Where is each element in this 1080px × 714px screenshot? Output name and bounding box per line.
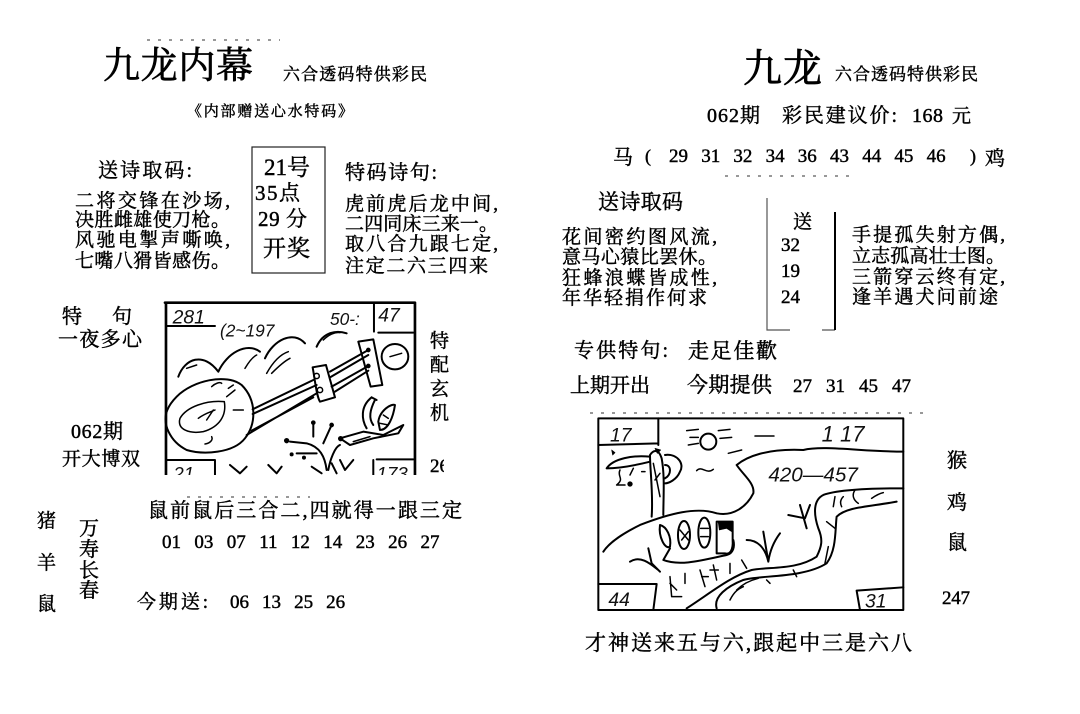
this issue label: 今期送: xyxy=(137,591,208,613)
small disc xyxy=(382,344,408,369)
bottom rhyme: 才神送来五与六,跟起中三是六八 xyxy=(585,631,912,655)
bracketed subtitle: 《内部赠送心水特码》 xyxy=(187,103,353,120)
left sketch: (2~197 xyxy=(220,321,276,341)
bracket with numbers: 送 xyxy=(793,211,812,233)
issue label xyxy=(62,420,140,470)
right sketch: 1 17 xyxy=(822,422,865,447)
grass xyxy=(630,505,810,572)
this issue numbers: 06 13 25 26 xyxy=(230,592,345,613)
wheel xyxy=(166,379,253,453)
left sketch: 21 xyxy=(172,463,194,484)
left sketch: 173 xyxy=(377,463,408,484)
last issue and this issue: 上期开出 xyxy=(570,374,650,397)
river bank line xyxy=(603,448,903,552)
issue and price xyxy=(707,104,971,127)
poem right two: 手提孤失射方偶, xyxy=(852,224,1005,246)
side text: 特配玄机: 特 xyxy=(430,330,449,352)
poem right one: 花间密约图风流, xyxy=(562,226,717,248)
right sketch: 17 xyxy=(610,426,633,447)
vertical text: 万寿长春: 万 xyxy=(79,518,99,540)
number sketch label: 420—457 xyxy=(768,464,859,487)
zodiac column right: 鸡 xyxy=(947,491,967,514)
zodiac column right xyxy=(947,449,967,554)
special phrase right xyxy=(574,339,777,363)
special phrase right: 专供特句: xyxy=(574,339,668,362)
special phrase right: 走足佳歡 xyxy=(688,339,777,363)
side text: 特配玄机: 26 xyxy=(430,456,449,477)
title: 九龙: 九龙 xyxy=(743,48,822,91)
right sketch xyxy=(598,418,903,612)
tree xyxy=(650,451,664,517)
numbers row: 01 03 07 11 12 14 23 26 27 xyxy=(162,532,440,553)
poem right two: 三箭穿云终有定, xyxy=(852,266,1005,288)
poem: send poem for code xyxy=(75,190,230,272)
issue label: 062期 xyxy=(71,420,123,443)
side text: 特配玄机: 玄 xyxy=(430,378,449,400)
special phrase: 句 xyxy=(112,305,132,328)
rhyme line: 鼠前鼠后三合二,四就得一跟三定 xyxy=(148,499,462,522)
horseshoe figure xyxy=(363,397,377,428)
draw time box: 开奖 xyxy=(263,236,310,261)
vertical text: 万寿长春 xyxy=(79,518,99,602)
zodiac column right: 猴 xyxy=(947,449,967,472)
poem right one: 意马心猿比罢休。 xyxy=(562,246,717,268)
poem: send poem for code: 风驰电掣声嘶唤, xyxy=(75,229,230,251)
vertical text: 万寿长春: 长 xyxy=(79,559,99,582)
special code poem: 取八合九跟七定, xyxy=(345,233,498,255)
side text: 特配玄机: 机 xyxy=(430,402,449,424)
rods and yokes xyxy=(247,350,368,435)
special phrase xyxy=(58,305,143,351)
sun xyxy=(700,434,716,450)
subtitle left: 六合透码特供彩民 xyxy=(283,65,427,84)
poem right one xyxy=(562,226,717,309)
bracket with numbers: 19 xyxy=(781,261,800,282)
zodiac column: 羊 xyxy=(37,552,56,574)
poem right one: 狂蜂浪蝶皆成性, xyxy=(562,267,717,289)
bracket with numbers: 32 xyxy=(781,235,800,256)
zodiac column: 鼠 xyxy=(37,593,56,615)
poem heading left: 送诗取码: xyxy=(98,159,192,182)
issue and price: 元 xyxy=(952,105,971,127)
draw time box: 35点 xyxy=(255,181,301,205)
draw time box xyxy=(252,147,325,273)
right sketch: 44 xyxy=(608,590,630,611)
bracket with numbers: 24 xyxy=(781,287,800,308)
poem: send poem for code: 二将交锋在沙场, xyxy=(75,190,230,212)
left sketch: 47 xyxy=(378,306,401,327)
zodiac numbers row: ( xyxy=(645,146,651,167)
side text: 特配玄机: 配 xyxy=(430,354,449,376)
special code poem xyxy=(345,193,498,277)
clouds xyxy=(178,332,347,377)
draw time box: 29 分 xyxy=(258,207,307,231)
poem: send poem for code: 决胜雌雄使刀枪。 xyxy=(75,209,230,231)
issue and price: 彩民建议价: xyxy=(782,104,897,127)
subtitle right: 六合透码特供彩民 xyxy=(835,65,978,84)
issue label: 开大博双 xyxy=(62,448,140,470)
vertical text: 万寿长春: 春 xyxy=(79,579,99,602)
vertical text: 万寿长春: 寿 xyxy=(79,538,99,561)
poem right two xyxy=(852,224,1005,308)
left sketch xyxy=(165,303,415,484)
zodiac column right: 鼠 xyxy=(947,531,967,554)
right sketch: 31 xyxy=(865,591,886,612)
special phrase: 一夜多心 xyxy=(58,328,143,351)
left page xyxy=(37,45,498,615)
poem right two: 立志孤高壮士图。 xyxy=(852,245,1005,267)
special phrase: 特 xyxy=(62,305,82,328)
special code poem heading: 特码诗句: xyxy=(345,161,437,184)
side text: 特配玄机 xyxy=(430,330,449,477)
zodiac numbers row: 29 31 32 34 36 43 44 45 46 xyxy=(669,146,946,167)
zodiac numbers row: ) xyxy=(970,146,976,167)
river xyxy=(687,488,903,608)
zodiac numbers row: 马 xyxy=(613,146,633,169)
left sketch: 50-: xyxy=(330,309,360,329)
plants xyxy=(290,423,353,473)
issue and price: 062期 xyxy=(707,104,760,127)
poem: send poem for code: 七嘴八猾皆感伤。 xyxy=(75,249,230,272)
special code poem: 注定二六三四来 xyxy=(345,255,488,277)
left sketch: 281 xyxy=(172,307,205,328)
zodiac numbers row xyxy=(613,146,1005,170)
bracket with numbers xyxy=(767,198,835,330)
special code poem: 二四同床三来一。 xyxy=(345,213,498,235)
right page xyxy=(562,48,1005,655)
number 247: 247 xyxy=(942,588,970,609)
draw time box: 21号 xyxy=(264,155,310,180)
poem heading right: 送诗取码 xyxy=(598,190,683,214)
zodiac column xyxy=(37,510,56,615)
last issue and this issue xyxy=(570,373,911,397)
title: 九龙内幕: 九龙内幕 xyxy=(103,45,253,87)
zodiac column: 猪 xyxy=(37,510,56,532)
special code poem: 虎前虎后龙中间, xyxy=(345,193,498,215)
last issue and this issue: 今期提供 xyxy=(687,373,773,397)
last issue and this issue: 27 31 45 47 xyxy=(793,376,911,397)
village xyxy=(660,525,670,547)
issue and price: 168 xyxy=(912,105,943,127)
zodiac numbers row: 鸡 xyxy=(985,147,1005,170)
poem right one: 年华轻捐作何求 xyxy=(562,287,707,309)
poem right two: 逢羊遇犬问前途 xyxy=(852,286,998,308)
